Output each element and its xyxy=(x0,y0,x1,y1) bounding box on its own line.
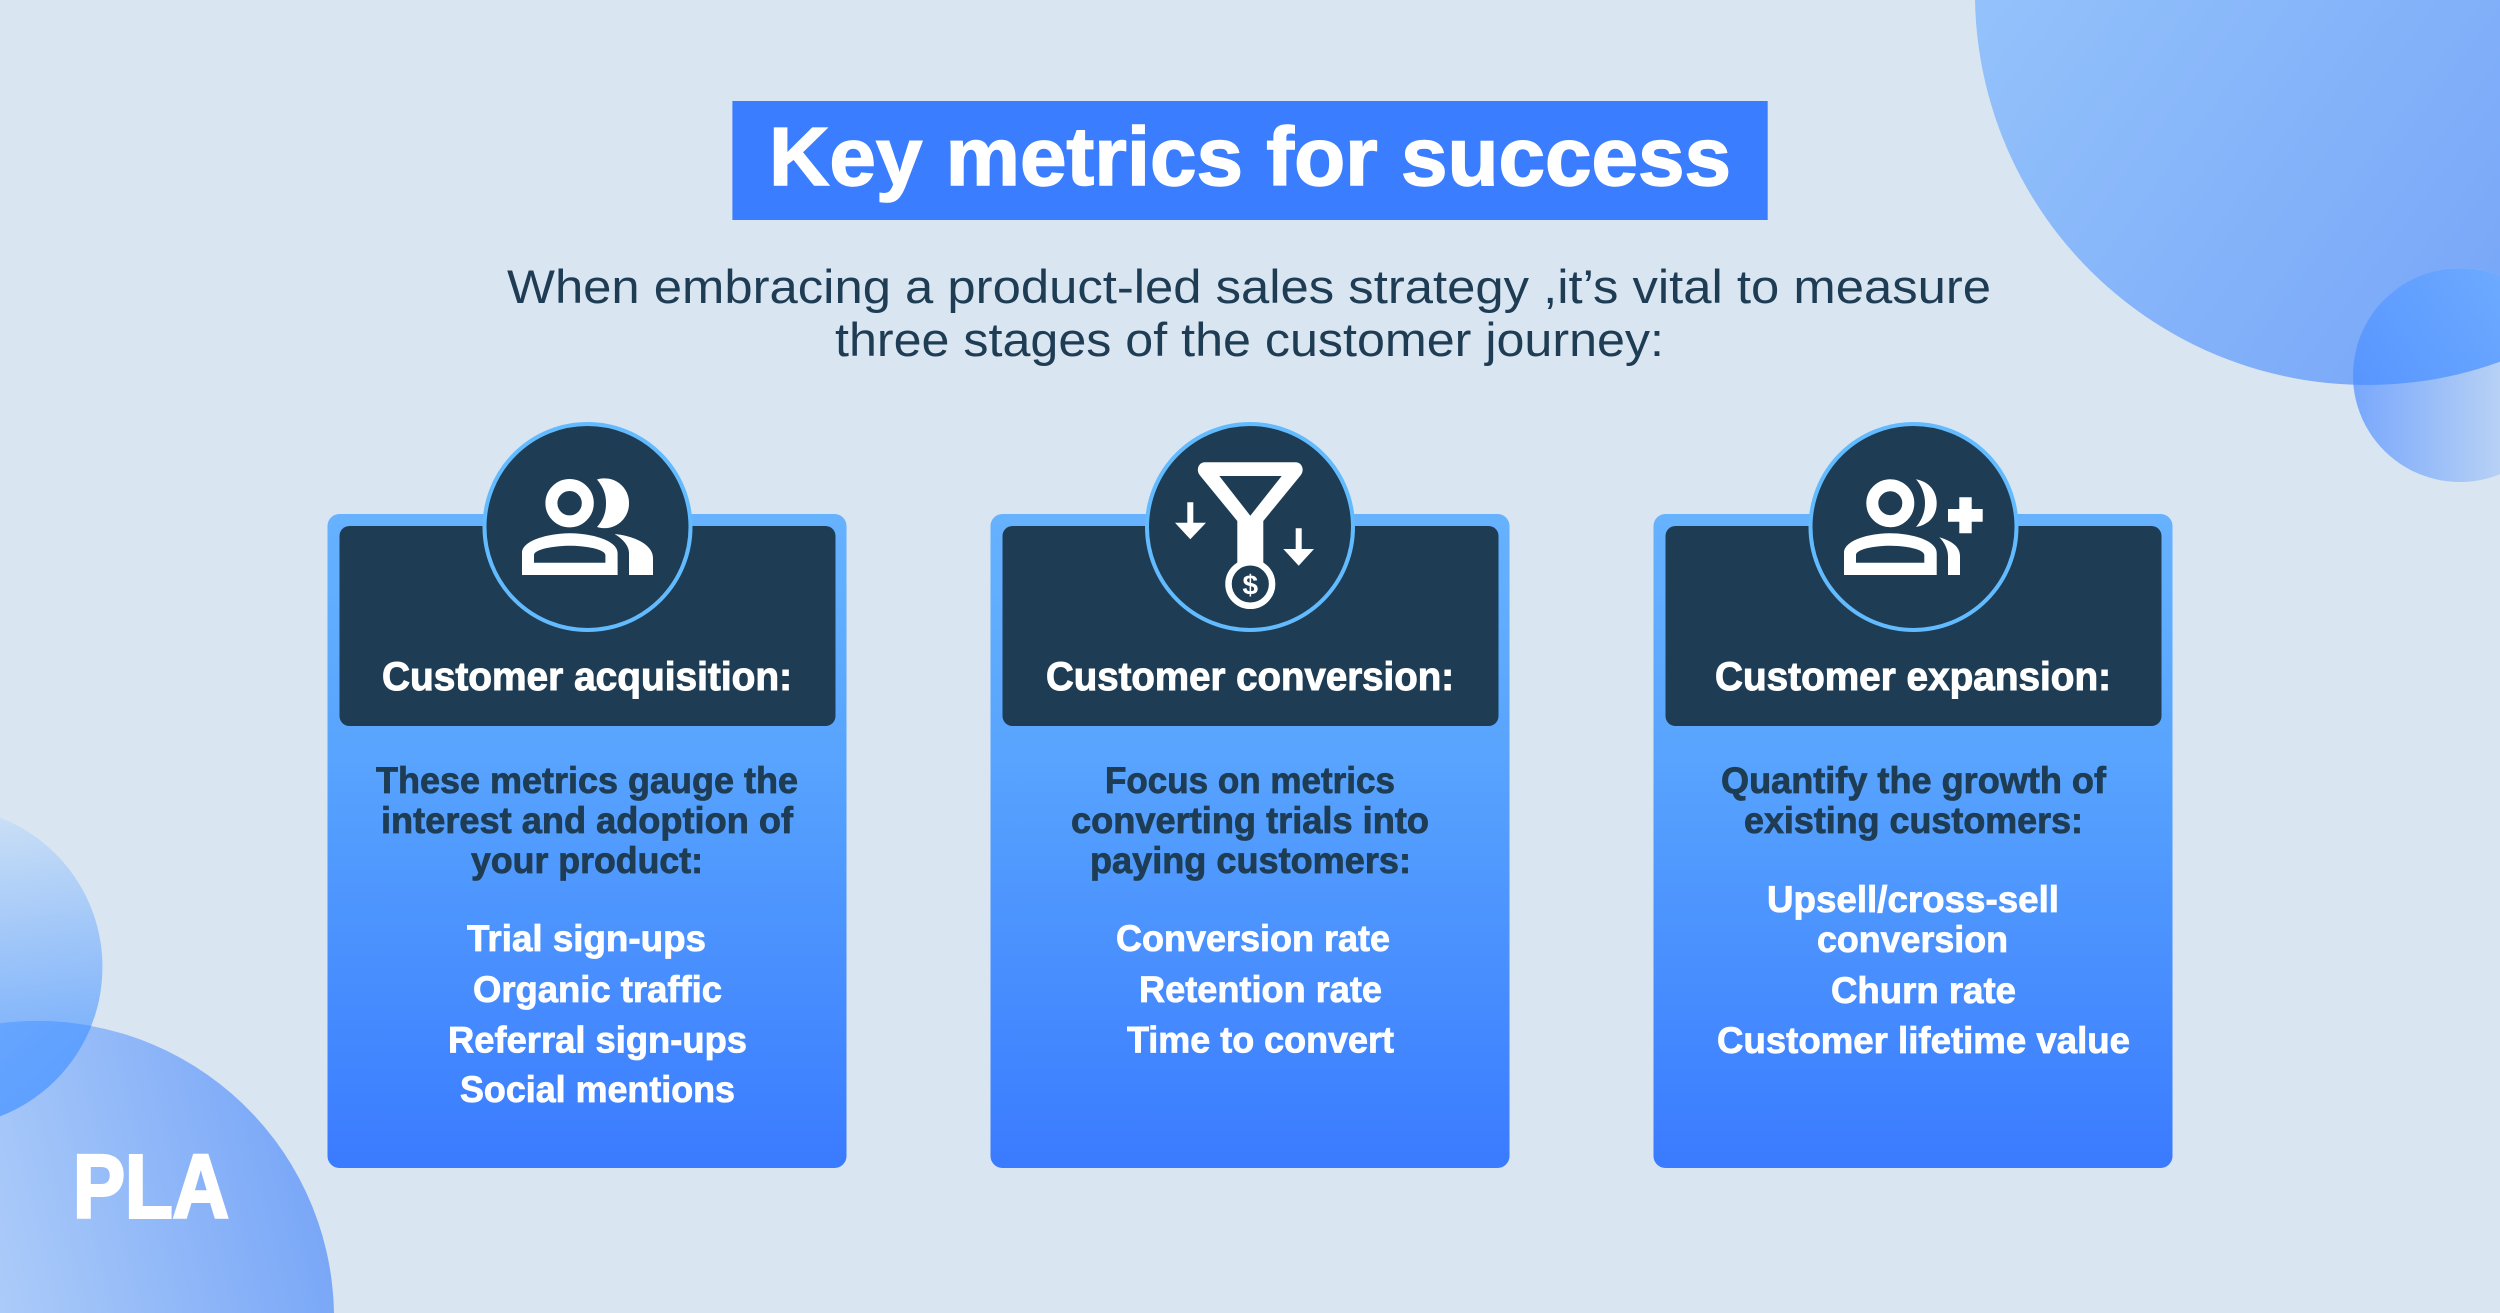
card header xyxy=(340,526,836,726)
metric list xyxy=(448,918,747,1110)
card background xyxy=(990,514,1510,1168)
description: converting trials into xyxy=(1071,800,1429,841)
card header xyxy=(1002,526,1498,726)
decorative circles: bottom left xyxy=(0,818,334,1313)
panel: customer acquisition xyxy=(328,424,846,1168)
title banner xyxy=(732,101,1768,220)
metric list: Upsell/cross-sell xyxy=(1767,879,2059,920)
intro text: When embracing a product-led sales strategy ,it’s vital to measure xyxy=(507,260,1991,313)
metric list: Social mentions xyxy=(460,1069,735,1110)
description: interest and adoption of xyxy=(381,800,794,841)
heading: Customer conversion: xyxy=(1046,655,1454,699)
icon: funnel with dollar coin xyxy=(1147,424,1353,630)
logo: PLA: PLA xyxy=(73,1138,229,1238)
metric list: Customer lifetime value xyxy=(1717,1020,2130,1061)
metric list: conversion xyxy=(1817,919,2008,960)
metric list xyxy=(1717,879,2130,1061)
metric list: Organic traffic xyxy=(473,969,722,1010)
heading: Customer expansion: xyxy=(1715,655,2111,699)
decorative circles: top right xyxy=(1975,0,2500,482)
card header xyxy=(1666,526,2162,726)
card background xyxy=(328,514,846,1168)
card background xyxy=(1654,514,2172,1168)
description: existing customers: xyxy=(1744,800,2083,841)
description: your product: xyxy=(471,840,703,881)
description xyxy=(1071,760,1429,881)
metric list: Trial sign-ups xyxy=(467,918,706,959)
panel: customer expansion xyxy=(1654,424,2172,1168)
title: Key metrics for success xyxy=(769,110,1731,203)
description: paying customers: xyxy=(1090,840,1411,881)
intro text xyxy=(507,260,1991,366)
description: Quantify the growth of xyxy=(1721,760,2107,801)
description: Focus on metrics xyxy=(1105,760,1395,801)
metric list: Referral sign-ups xyxy=(448,1020,747,1060)
description xyxy=(1721,760,2107,841)
icon: people xyxy=(484,424,690,630)
metric list: Time to convert xyxy=(1127,1020,1394,1060)
panel: customer conversion xyxy=(990,424,1510,1168)
metric list xyxy=(1116,918,1394,1060)
metric list: Churn rate xyxy=(1831,970,2016,1011)
heading: Customer acquisition: xyxy=(382,655,792,699)
description: These metrics gauge the xyxy=(376,760,798,801)
description xyxy=(376,760,798,881)
metric list: Retention rate xyxy=(1139,969,1382,1010)
icon: people with plus xyxy=(1810,424,2016,630)
metric list: Conversion rate xyxy=(1116,918,1390,959)
icon: funnel with dollar coin: $ xyxy=(1243,570,1259,600)
intro text: three stages of the customer journey: xyxy=(835,313,1664,366)
